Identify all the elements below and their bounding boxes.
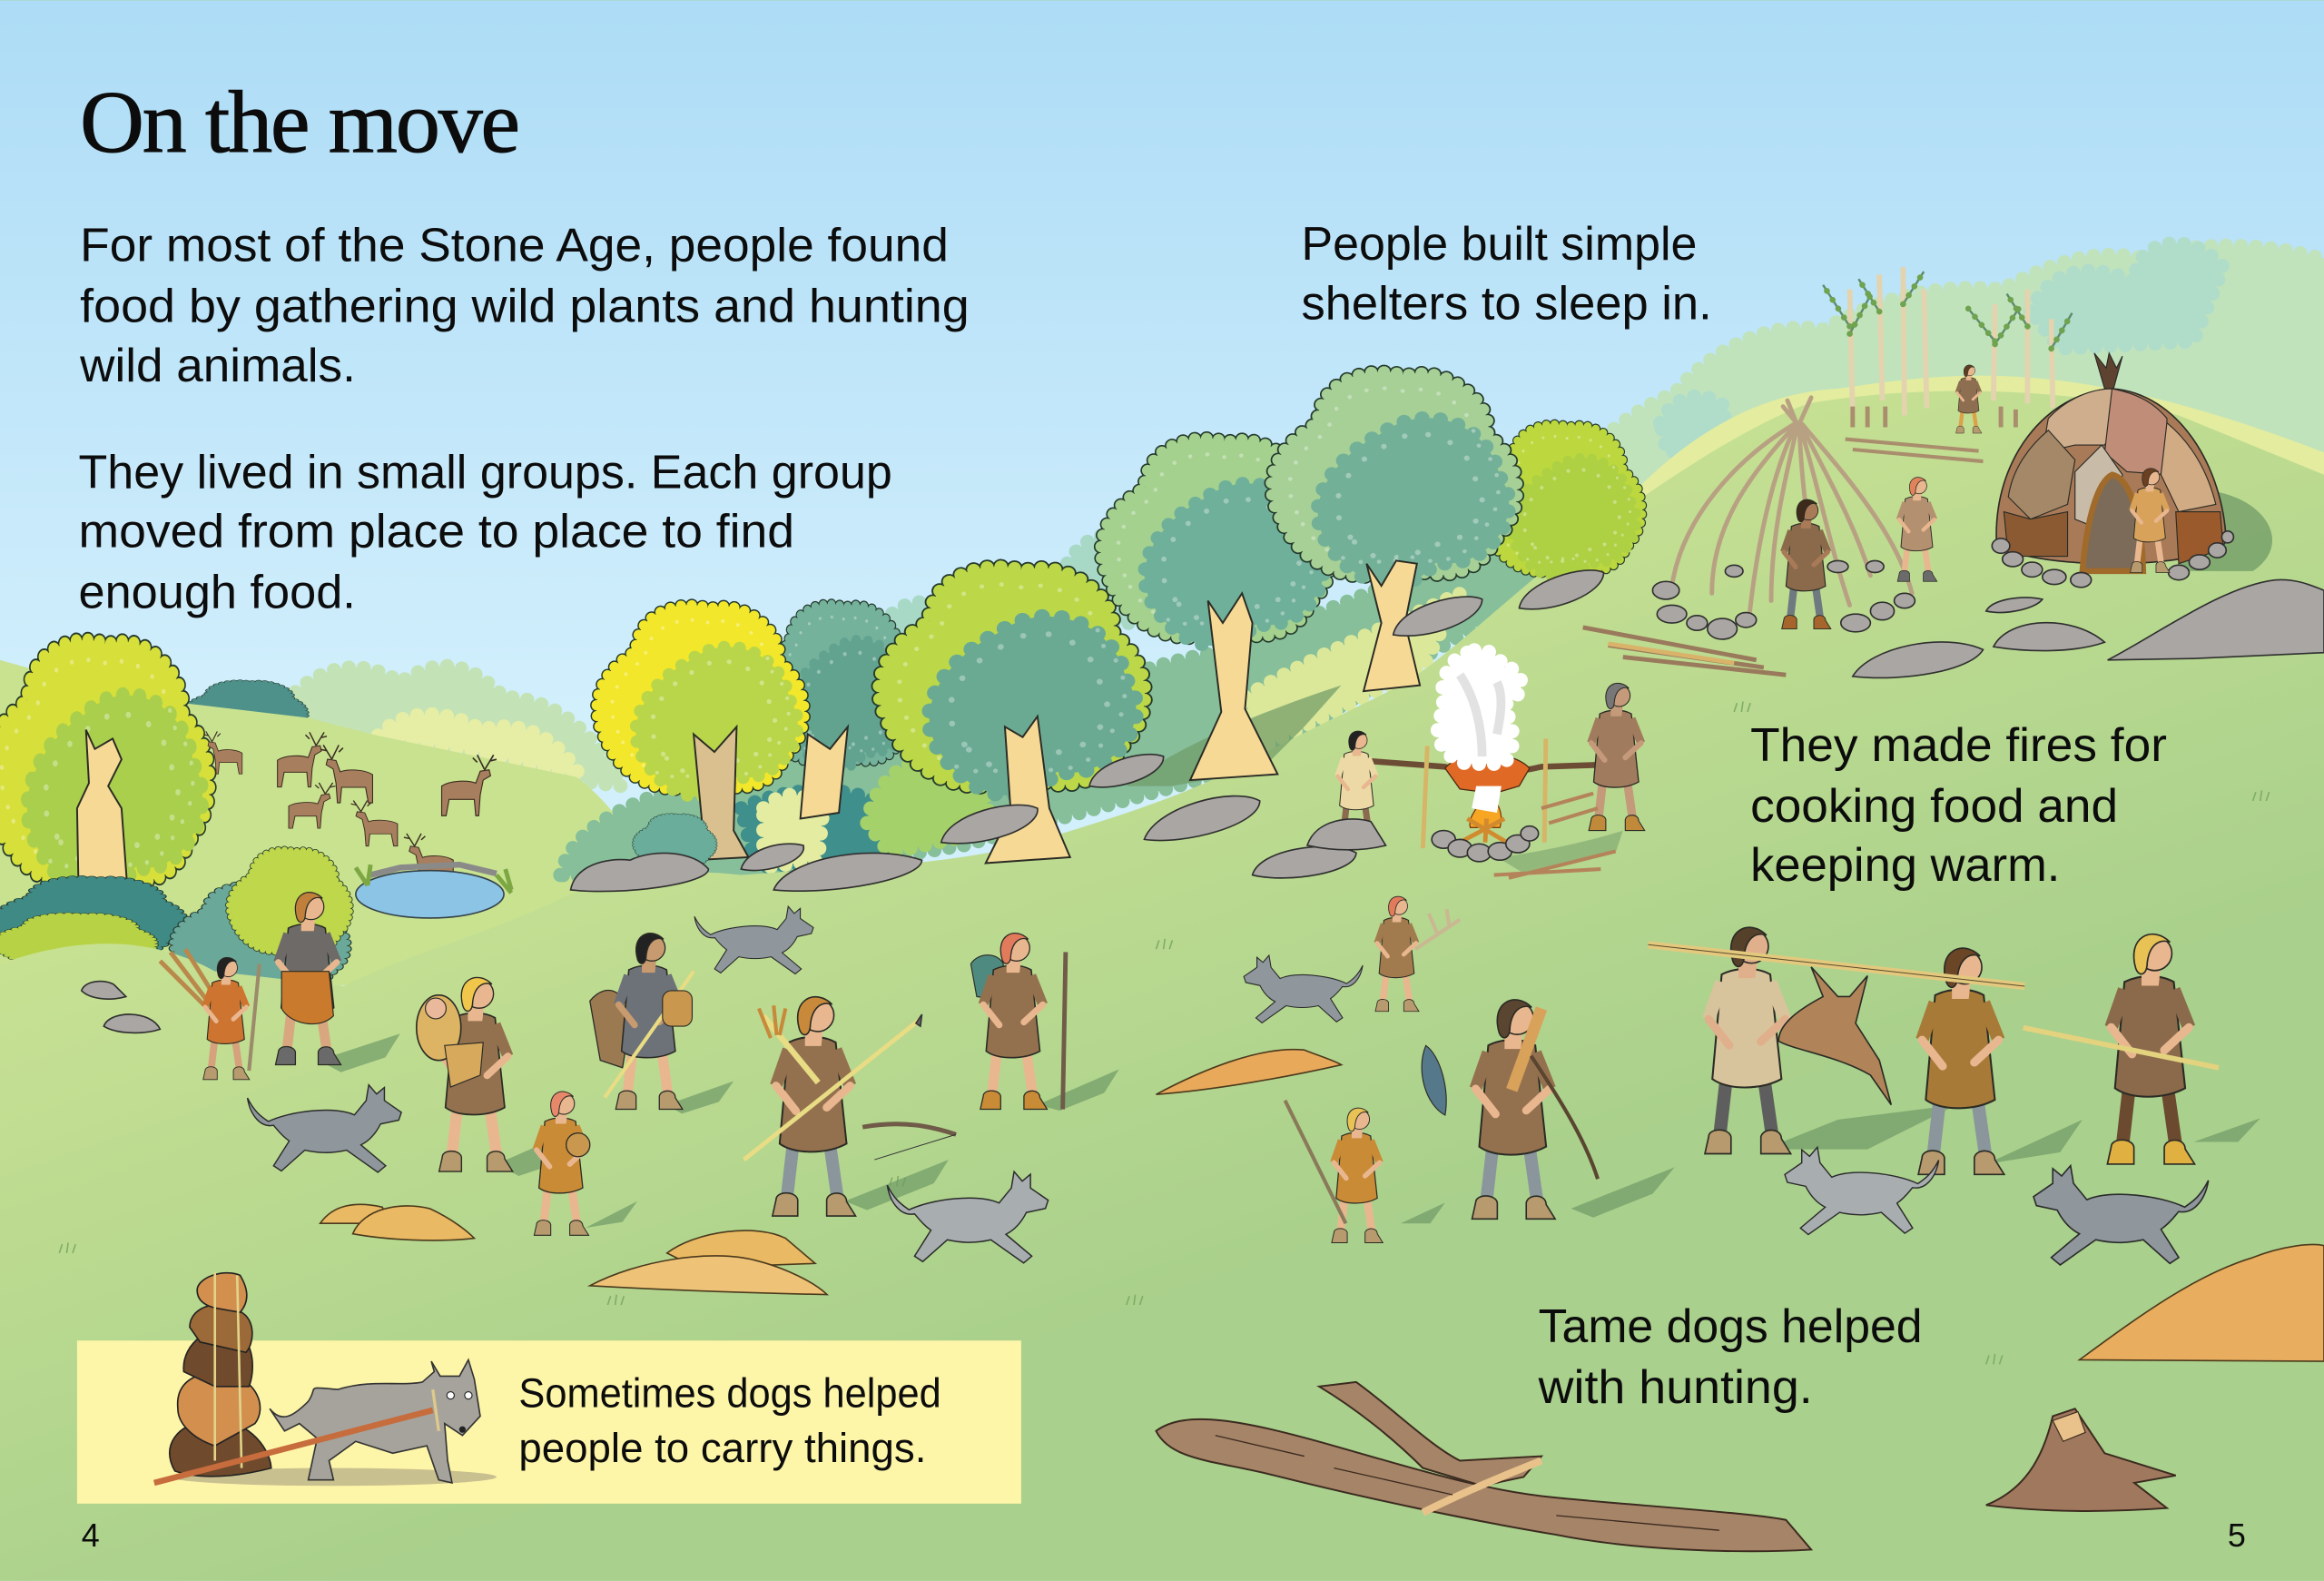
sand mound long <box>1156 1050 1342 1094</box>
woodcutter at saplings <box>1956 365 1982 433</box>
spear hunter right <box>2024 934 2219 1164</box>
wolf 5 <box>1785 1147 1939 1235</box>
intro text block: wild animals. <box>79 340 356 392</box>
backing foliage along ridge <box>560 497 1638 883</box>
woman with hide bundle <box>590 934 694 1110</box>
tree: teal back <box>759 604 918 819</box>
fires text block: They made fires for <box>1750 719 2167 772</box>
shelters text block <box>1301 218 1712 330</box>
woman in hide cloak <box>275 893 341 1065</box>
man at fire <box>1589 683 1645 831</box>
branches on ground <box>1583 627 1786 675</box>
main hillside ground <box>0 391 2324 1581</box>
firewood pile <box>1494 794 1616 878</box>
person building frame right <box>1897 478 1937 581</box>
hunter with duck <box>1422 1000 1598 1219</box>
callout text <box>518 1370 941 1471</box>
tree: yellow <box>596 605 804 860</box>
grass tufts <box>59 702 2270 1364</box>
intro text block: food by gathering wild plants and hunting <box>80 281 970 333</box>
callout panel: dogs carrying <box>77 1272 1021 1504</box>
shelter frame under construction <box>1652 398 1915 639</box>
callout text: people to carry things. <box>518 1425 926 1471</box>
sand mound small <box>320 1204 474 1240</box>
wolf 2 <box>694 906 813 973</box>
dark teal bush behind meadow <box>184 682 306 738</box>
intro text block <box>79 220 970 392</box>
seated person at fire <box>1336 731 1378 843</box>
sand mound middle <box>590 1230 827 1295</box>
page number right: 5 <box>2228 1517 2246 1554</box>
tree stump <box>1986 1408 2176 1511</box>
pond <box>356 865 511 918</box>
girl with berry basket <box>534 1092 590 1235</box>
dogs text block: with hunting. <box>1538 1361 1813 1414</box>
hillside shadow under trees <box>1127 686 1342 786</box>
wolf 1 <box>248 1085 401 1172</box>
tree: mixed lime and teal <box>879 567 1145 863</box>
dogs text block <box>1538 1300 1923 1414</box>
far tree line left <box>267 535 1148 786</box>
sand mound right <box>2080 1245 2324 1361</box>
wolf 4 <box>1244 955 1363 1023</box>
tree: pale green <box>1272 371 1517 691</box>
child carrying sticks <box>160 949 260 1080</box>
fires text block: keeping warm. <box>1750 839 2060 892</box>
tree: left lime <box>0 640 210 893</box>
meadow valley <box>0 660 890 1008</box>
campfire and spit <box>1366 738 1630 875</box>
bush near yellow tree <box>635 815 715 866</box>
person at hut entrance <box>2131 469 2170 572</box>
men carrying deer on pole <box>1649 927 2024 1174</box>
far tree line right <box>1527 243 2324 548</box>
woman with staff <box>970 934 1066 1110</box>
hut shadow <box>2179 489 2272 571</box>
title: On the move <box>80 74 520 172</box>
pale yellow bushes on meadow edge <box>378 715 581 777</box>
wolf 3 <box>887 1171 1049 1263</box>
intro text block: For most of the Stone Age, people found <box>80 220 949 272</box>
shelters text block: shelters to sleep in. <box>1301 277 1712 330</box>
stumps and branches <box>1846 407 2015 461</box>
groups text block: enough food. <box>79 567 356 619</box>
lime bush <box>1481 424 1642 578</box>
callout text: Sometimes dogs helped <box>518 1370 941 1417</box>
group: figure shadows <box>319 1033 2260 1228</box>
hunter with spear and bow <box>744 997 956 1216</box>
deer herd <box>203 731 497 885</box>
fires text block <box>1750 719 2167 892</box>
wolf 6 <box>2034 1166 2209 1265</box>
page number left: 4 <box>82 1517 100 1554</box>
saplings being cut <box>1823 267 2072 415</box>
tree: green teal <box>1101 439 1332 780</box>
hide covered hut <box>1992 353 2233 588</box>
shelters text block: People built simple <box>1301 218 1697 271</box>
woman carrying baby <box>417 977 513 1171</box>
left foreground shrubs <box>0 849 350 992</box>
fires text block: cooking food and <box>1750 780 2118 833</box>
dog pulling load illustration <box>154 1272 497 1486</box>
fallen log <box>1156 1382 1811 1551</box>
groups text block <box>79 446 892 619</box>
groups text block: moved from place to place to find <box>79 506 794 558</box>
smoke plume <box>1438 649 1521 813</box>
child with antler <box>1375 896 1460 1012</box>
child with spear <box>1285 1101 1383 1242</box>
rocks along slope <box>82 570 2324 1033</box>
distant yellow-green slope <box>1616 376 2324 512</box>
seat rock <box>1307 819 1386 850</box>
dogs text block: Tame dogs helped <box>1539 1300 1923 1353</box>
groups text block: They lived in small groups. Each group <box>79 446 892 499</box>
person building frame left <box>1782 499 1831 629</box>
